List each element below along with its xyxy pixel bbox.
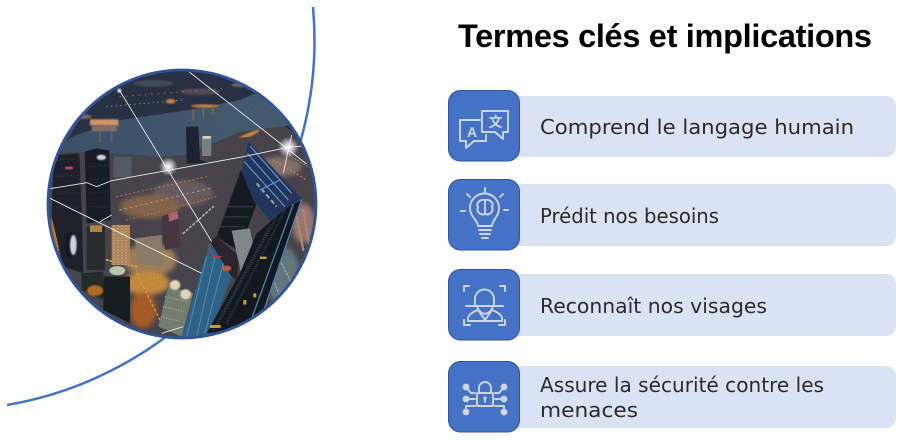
- far shore: [67, 72, 293, 140]
- main skyscraper inner opening: [217, 170, 257, 252]
- icon: digital padlock: [448, 362, 520, 432]
- icon: translation speech bubbles: [448, 90, 520, 161]
- photo grain: [47, 67, 320, 340]
- icon: translation speech bubbles: A: [467, 124, 477, 140]
- label: Assure la sécurité contre les: [540, 373, 824, 397]
- label: Comprend le langage humain: [540, 115, 854, 139]
- dark towers left: [52, 153, 83, 273]
- label: Prédit nos besoins: [540, 204, 719, 228]
- lit mid towers: [112, 225, 130, 265]
- item 4: assure la sécurité: [448, 362, 896, 432]
- item 2: prédit nos besoins: [448, 180, 896, 250]
- icon: translation speech bubbles: 文: [488, 114, 502, 130]
- network lines: [50, 72, 307, 333]
- label: menaces: [540, 398, 638, 422]
- label: [540, 373, 824, 422]
- icon: light bulb with brain: [448, 180, 520, 250]
- label: Reconnaît nos visages: [540, 294, 767, 318]
- item 1: comprend le langage humain: [448, 90, 896, 161]
- far-shore lights: [80, 80, 260, 138]
- decorative arc: [7, 7, 315, 405]
- network glow nodes: [278, 137, 299, 158]
- bottom tower: [158, 287, 193, 337]
- middle city: [184, 136, 252, 155]
- main skyscraper left face: [182, 242, 233, 337]
- river: [60, 90, 293, 157]
- title: Termes clés et implications: [458, 18, 872, 54]
- icon: face recognition: [448, 270, 520, 340]
- photo: city skyline at night in a circle: [45, 66, 320, 343]
- item 3: reconnaît nos visages: [448, 270, 896, 340]
- mid-city small buildings and lights: [53, 153, 313, 320]
- main skyscraper top crown: [242, 142, 302, 223]
- main skyscraper lower dark face: [207, 200, 302, 333]
